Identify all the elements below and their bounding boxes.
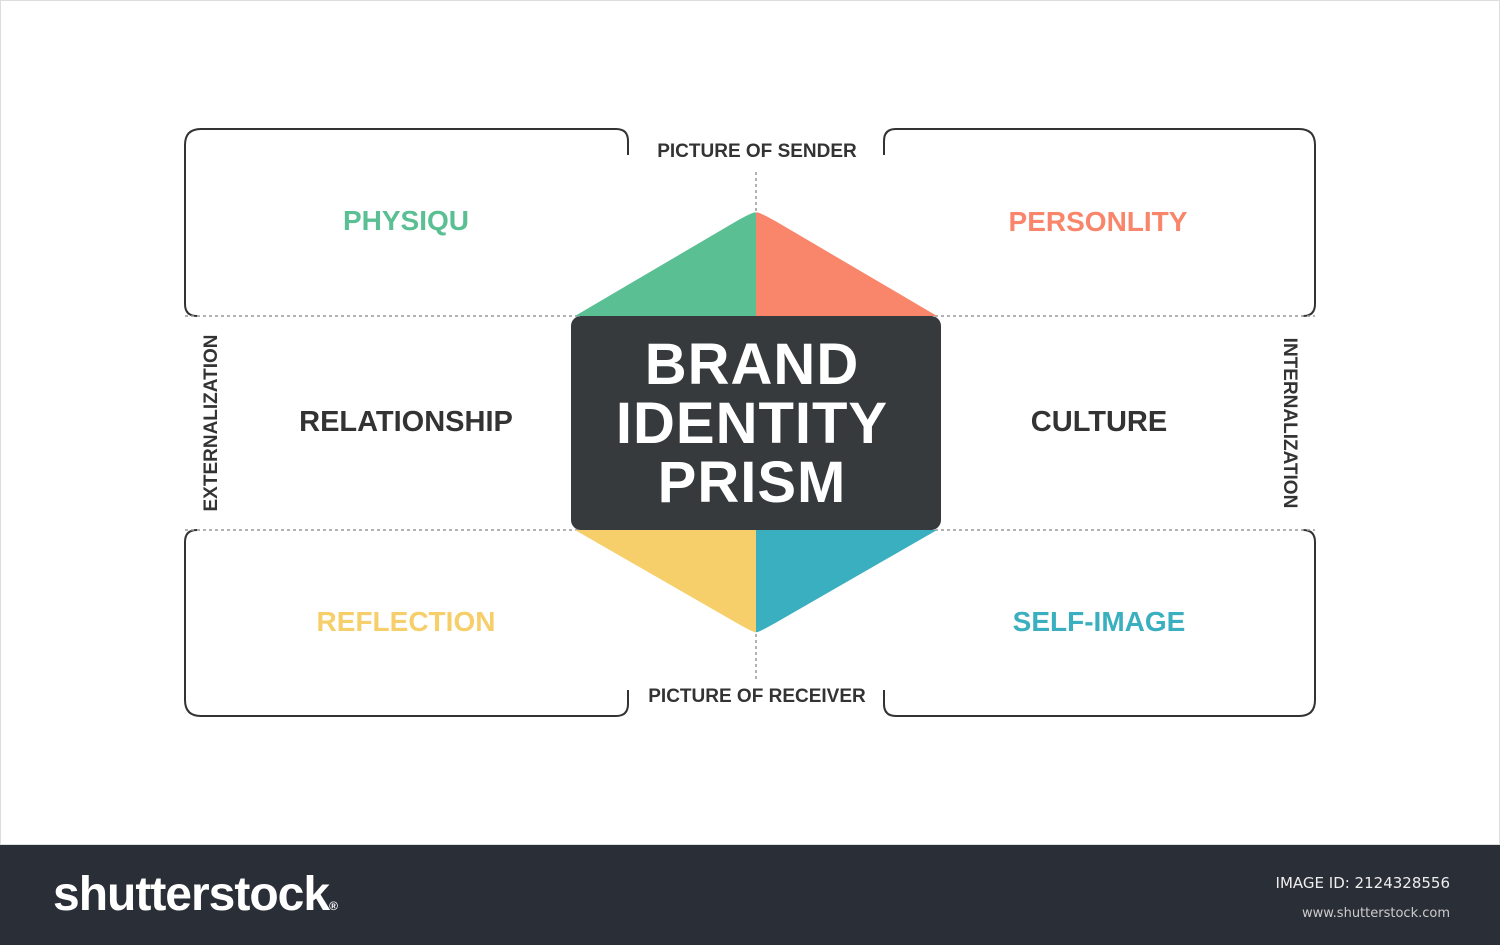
footer id	[1276, 874, 1450, 921]
footer	[0, 845, 1500, 945]
bracket: bottom right	[884, 530, 1315, 716]
label: externalization: EXTERNALIZATION	[201, 335, 222, 511]
label: personlity: PERSONLITY	[1009, 206, 1187, 237]
label: physiqu: PHYSIQU	[343, 205, 469, 236]
bracket: bottom left	[185, 530, 628, 716]
label: picture of receiver: PICTURE OF RECEIVER	[648, 686, 866, 707]
label: self-image: SELF-IMAGE	[1013, 606, 1185, 637]
label: culture: CULTURE	[1031, 406, 1167, 438]
bracket: top right	[884, 129, 1315, 316]
label: picture of sender: PICTURE OF SENDER	[657, 141, 857, 162]
footer id: IMAGE ID: 2124328556	[1276, 874, 1450, 892]
footer id: www.shutterstock.com	[1302, 906, 1450, 921]
label: reflection: REFLECTION	[317, 606, 495, 637]
title: IDENTITY	[616, 391, 888, 456]
title: PRISM	[658, 450, 846, 515]
footer logo: shutterstock®	[53, 868, 337, 921]
title	[616, 332, 888, 515]
label: internalization: INTERNALIZATION	[1279, 338, 1300, 508]
bracket: top left	[185, 129, 628, 316]
label: relationship: RELATIONSHIP	[299, 406, 513, 438]
title: BRAND	[645, 332, 859, 397]
hexagon prism	[571, 212, 941, 632]
